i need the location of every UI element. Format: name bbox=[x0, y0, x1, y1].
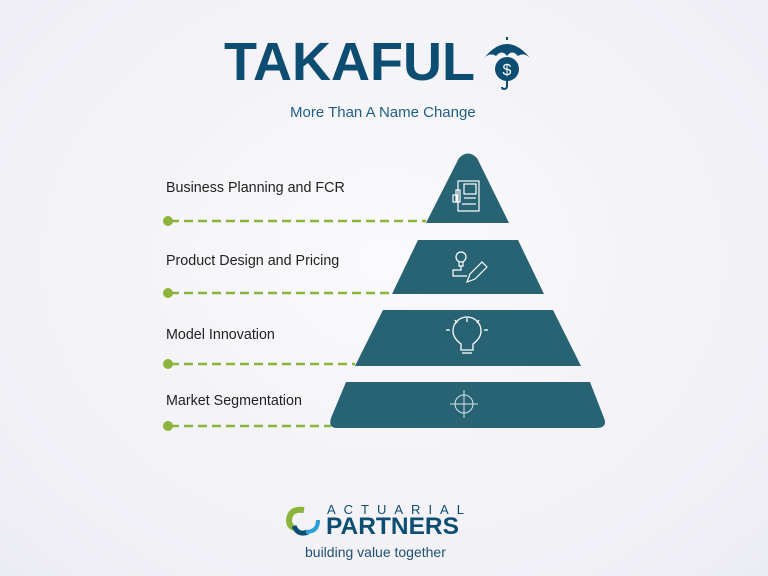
tier 3 bbox=[355, 310, 581, 366]
icon: logo mark bbox=[286, 506, 320, 536]
logo: PARTNERS bbox=[326, 513, 459, 540]
title: TAKAFUL bbox=[224, 32, 475, 92]
label: Model Innovation: Model Innovation bbox=[166, 327, 275, 343]
label: Business Planning and FCR: Business Planning and FCR bbox=[166, 180, 345, 196]
tier 2 bbox=[392, 240, 544, 294]
logo bbox=[286, 502, 472, 560]
icon: umbrella with dollar: $ bbox=[503, 62, 512, 79]
icon: umbrella with dollar bbox=[484, 37, 530, 90]
label: Product Design and Pricing: Product Design and Pricing bbox=[166, 253, 339, 269]
subtitle: More Than A Name Change bbox=[290, 104, 476, 121]
label: Market Segmentation: Market Segmentation bbox=[166, 393, 302, 409]
logo: ACTUARIAL bbox=[327, 502, 472, 517]
tier 1 bbox=[426, 154, 509, 223]
tier 4 bbox=[330, 382, 605, 428]
logo: building value together bbox=[305, 544, 446, 560]
